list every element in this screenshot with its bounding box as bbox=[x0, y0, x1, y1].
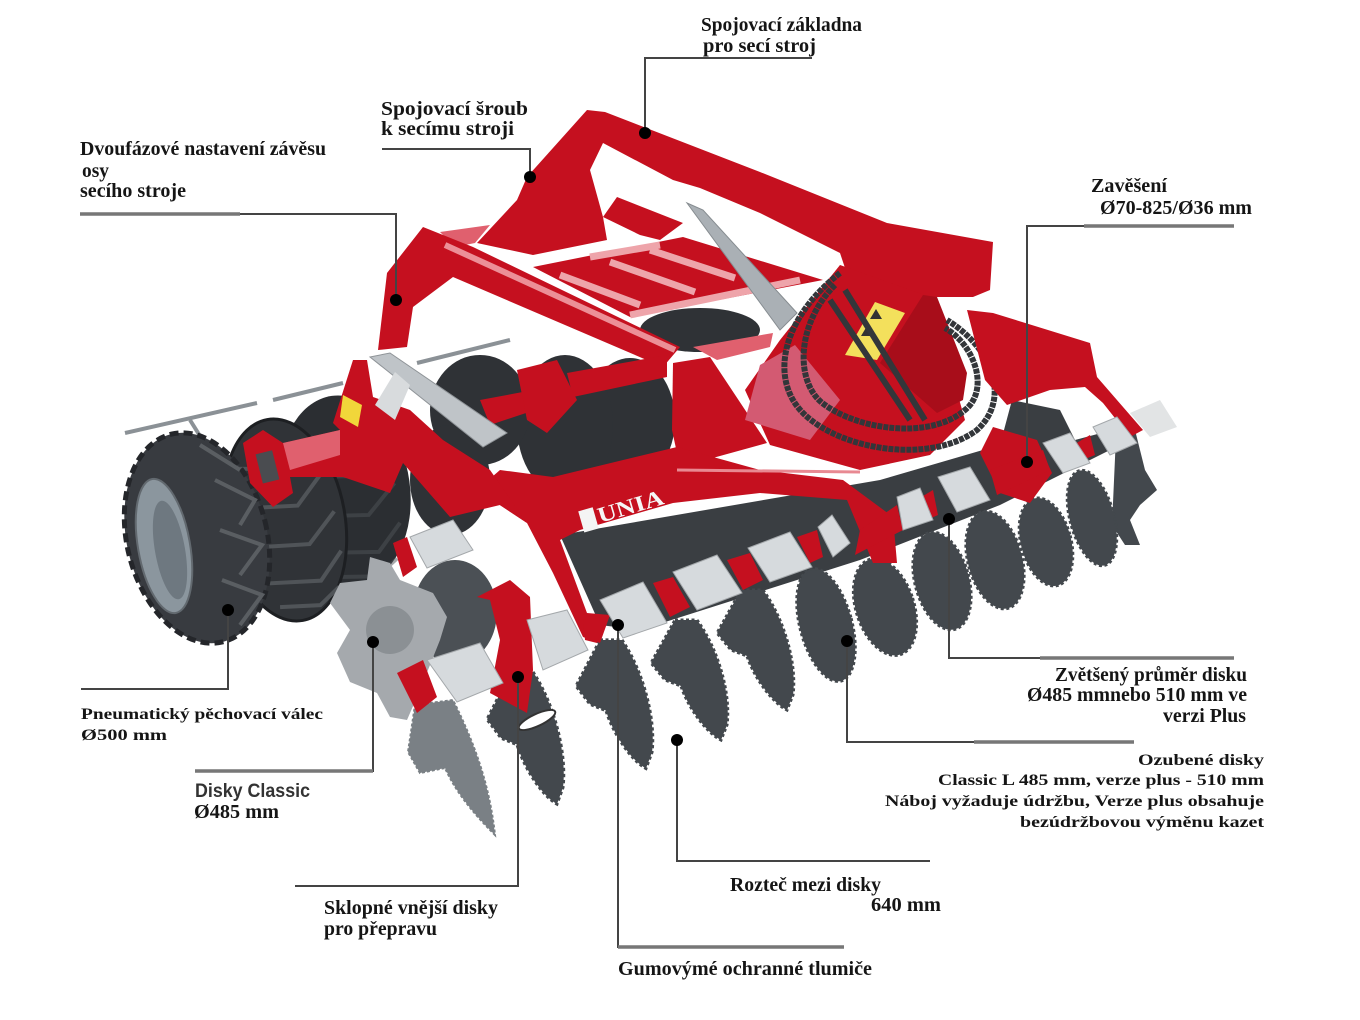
top cylinder bbox=[687, 203, 797, 330]
callout: Spojovací šroub: k secímu stroji bbox=[381, 118, 514, 140]
callout: Dvoufázové nastavení: osy bbox=[82, 160, 109, 182]
callout: Ozubené disky: Náboj vyžaduje údržbu, Verze plus obsahuje bbox=[885, 793, 1264, 810]
callout: Spojovací základna bbox=[639, 14, 862, 139]
left cylinder bbox=[370, 353, 507, 447]
centre box bbox=[745, 265, 965, 470]
lower arch beam bbox=[378, 227, 680, 367]
callout: Pneumatický pěchovací válec: Ø500 mm bbox=[81, 727, 168, 744]
callout: Zvětšený průměr disku: Ø485 mmnebo 510 mm ve bbox=[1027, 684, 1247, 706]
callout: Pneumatický pěchovací válec bbox=[81, 604, 323, 744]
callout: Ozubené disky: Classic L 485 mm, verze plus - 510 mm bbox=[938, 772, 1265, 789]
callout: Rozteč mezi disky: Rozteč mezi disky bbox=[730, 874, 881, 896]
callout: Ozubené disky: Ozubené disky bbox=[1138, 752, 1264, 769]
mid hub bbox=[517, 360, 577, 433]
rear platform highlights bbox=[440, 225, 490, 247]
callout: Zvětšený průměr disku: Zvětšený průměr disku bbox=[1055, 664, 1247, 686]
callout: Pneumatický pěchovací válec: Pneumatický pěchovací válec bbox=[81, 706, 323, 723]
callout: Disky Classic bbox=[194, 636, 379, 823]
callout: Gumovýmé ochranné tlumiče bbox=[612, 619, 872, 980]
tyre 1 with rim bbox=[103, 417, 291, 659]
callout: Rozteč mezi disky: 640 mm bbox=[871, 894, 941, 916]
callout: Ozubené disky: bezúdržbovou výměnu kazet bbox=[1020, 814, 1265, 831]
cross beams bbox=[693, 333, 773, 360]
callout: Zavěšení: Ø70-825/Ø36 mm bbox=[1100, 197, 1252, 219]
callout: Sklopné vnější disky: Sklopné vnější disky bbox=[324, 897, 498, 919]
main beam and curved legs bbox=[477, 447, 897, 643]
warning sticker bbox=[845, 302, 905, 360]
callout: Zavěšení: Zavěšení bbox=[1091, 175, 1167, 197]
callout: Dvoufázové nastavení bbox=[80, 138, 402, 306]
callout: Disky Classic: Ø485 mm bbox=[194, 801, 279, 823]
brand bbox=[578, 484, 667, 533]
toolbar clamps and red blocks bbox=[393, 400, 1177, 734]
right frame bbox=[967, 310, 1143, 437]
rear hidden discs row bbox=[560, 400, 1130, 630]
centre gusset bbox=[672, 357, 767, 467]
machine illustration bbox=[103, 110, 1177, 835]
callout: Zvětšený průměr disku: verzi Plus bbox=[1163, 705, 1246, 727]
callout: Dvoufázové nastavení: Dvoufázové nastavení závěsu bbox=[80, 138, 326, 160]
rear rake rails bbox=[125, 340, 510, 436]
callout: Spojovací šroub bbox=[381, 98, 536, 183]
outer light disc bbox=[408, 700, 495, 835]
callout: Spojovací základna: pro secí stroj bbox=[703, 35, 816, 57]
tyre 2 bbox=[208, 409, 362, 631]
right hub bbox=[980, 427, 1052, 503]
discs row bbox=[487, 430, 1157, 804]
callout: Rozteč mezi disky bbox=[671, 734, 941, 916]
tyre 3 bbox=[267, 387, 423, 593]
callout: Zavěšení bbox=[1021, 175, 1252, 468]
left body and axle arm bbox=[243, 360, 527, 523]
hydraulic hoses bbox=[784, 273, 995, 450]
callout: Disky Classic: Disky Classic bbox=[195, 781, 310, 802]
callout: Sklopné vnější disky bbox=[295, 671, 524, 940]
notched grey disc bbox=[330, 557, 447, 720]
callout: Gumovýmé ochranné tlumiče: Gumovýmé ochranné tlumiče bbox=[618, 958, 872, 980]
callout: Ozubené disky bbox=[841, 635, 1265, 831]
callout: Spojovací šroub: Spojovací šroub bbox=[381, 98, 528, 120]
callout: Spojovací základna: Spojovací základna bbox=[701, 14, 862, 36]
callout: Zvětšený průměr disku bbox=[943, 513, 1247, 727]
upper frame tower bbox=[477, 110, 993, 297]
yellow label bbox=[340, 395, 362, 427]
lattice deck bbox=[533, 237, 823, 317]
callout: Sklopné vnější disky: pro přepravu bbox=[324, 918, 437, 940]
rear tyres behind frame bbox=[410, 308, 760, 535]
brand: UNIA bbox=[594, 484, 667, 528]
callout: Dvoufázové nastavení: secího stroje bbox=[80, 180, 186, 202]
